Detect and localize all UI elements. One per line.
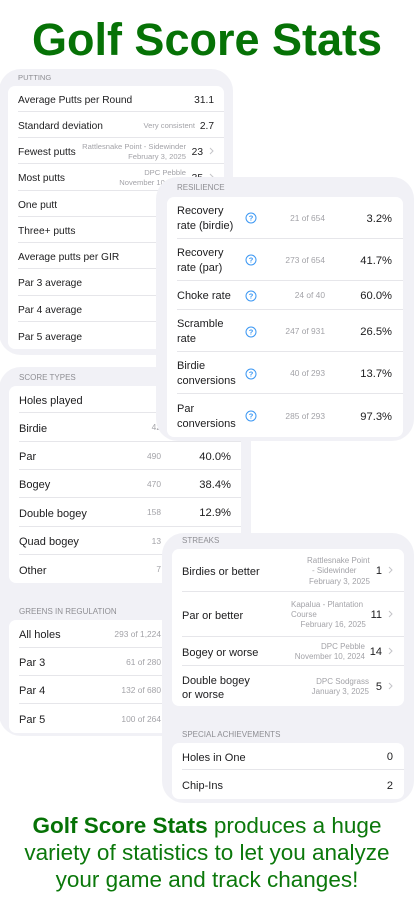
card: putting rows [8, 86, 224, 349]
row: par 4 [19, 676, 241, 704]
row: birdies or better: February 3, 2025 [309, 577, 370, 586]
row: recovery rate (par): ? [249, 255, 254, 264]
row: one putt: One putt [18, 200, 57, 211]
row: all holes [19, 620, 241, 648]
row: chip-ins: 2 [387, 780, 393, 792]
row: par conversions: 97.3% [360, 410, 392, 422]
row: bogey [19, 470, 241, 498]
row: par conversions: Par [177, 403, 194, 415]
panel: score types and greens in regulation [0, 367, 251, 736]
row: double bogey [19, 498, 241, 527]
row: all holes: 293 of 1,224 [114, 628, 161, 638]
row: other: 7 [156, 564, 161, 574]
card: resilience rows [167, 197, 403, 437]
row: fewest putts: February 3, 2025 [128, 152, 186, 160]
row: double bogey or worse: Double bogey [182, 674, 250, 686]
row: par or better: Kapalua - Plantation [291, 600, 363, 609]
row: par or better: February 16, 2025 [300, 620, 366, 629]
row: double bogey or worse: 5 [376, 681, 382, 693]
row: recovery rate (birdie): Recovery [177, 205, 223, 217]
row: recovery rate (birdie): 3.2% [366, 212, 392, 224]
row: scramble rate: Scramble [177, 318, 223, 330]
caption [24, 813, 390, 892]
row: birdie conversions: Birdie [177, 360, 205, 372]
row: par 4: Par 4 [19, 685, 45, 697]
row: recovery rate (par): 273 of 654 [285, 254, 325, 264]
row: double bogey: Double bogey [19, 508, 87, 520]
card: streaks rows [172, 549, 404, 706]
row: standard deviation: Standard deviation [18, 121, 103, 132]
row: par: 490 [147, 450, 161, 460]
caption: your game and track changes! [56, 867, 358, 892]
row: par 4 average [18, 296, 224, 322]
row: average putts per GIR: Average putts per GIR [18, 252, 119, 263]
row: average putts per round: Average Putts per Round [18, 95, 132, 106]
row: fewest putts: Fewest putts [18, 147, 76, 158]
row: par conversions [177, 403, 392, 430]
row: double bogey: 158 [147, 507, 161, 517]
row: chip-ins: Chip-Ins [182, 780, 223, 792]
row: holes in one [182, 743, 404, 770]
heading: resilience: RESILIENCE [177, 183, 225, 192]
row: most putts: November 10, 2024 [119, 178, 186, 187]
row: standard deviation: Very consistent [144, 121, 195, 130]
row: double bogey or worse: DPC Sodgrass [316, 677, 369, 686]
row: par or better: Course [291, 610, 317, 619]
row: birdies or better: Birdies or better [182, 566, 260, 578]
row: par [19, 442, 241, 470]
card: special achievements rows [172, 743, 404, 799]
row: double bogey or worse [182, 674, 392, 701]
row: standard deviation: 2.7 [200, 120, 214, 132]
title: Golf Score Stats [32, 14, 382, 65]
row: par 5: 100 of 264 [121, 714, 161, 724]
row: birdies or better: - Sidewinder [312, 566, 356, 575]
row: chip-ins [182, 780, 393, 792]
row: recovery rate (birdie): 21 of 654 [290, 212, 325, 222]
row: bogey or worse [182, 637, 404, 666]
row: choke rate [177, 281, 403, 310]
row: recovery rate (birdie): rate (birdie) [177, 220, 233, 232]
row: par 3 [19, 648, 241, 676]
row: birdie [19, 413, 241, 442]
row: birdies or better: 1 [376, 565, 382, 577]
row: choke rate: 24 of 40 [295, 290, 325, 300]
row: bogey or worse: November 10, 2024 [295, 652, 365, 661]
row: par: Par [19, 451, 36, 463]
row: average putts per GIR [18, 243, 224, 269]
heading: greens in regulation: GREENS IN REGULATION [19, 607, 117, 616]
row: scramble rate: ? [249, 327, 254, 336]
heading: putting: PUTTING [18, 73, 51, 82]
row: par 4: 132 of 680 [121, 684, 161, 694]
caption: variety of statistics to let you analyze [24, 840, 390, 865]
row: quad bogey [19, 527, 241, 555]
row: all holes: All holes [19, 629, 61, 641]
row: other: Other [19, 565, 47, 577]
row: par: 40.0% [199, 450, 231, 462]
row: standard deviation [18, 112, 224, 138]
heading: score types: SCORE TYPES [19, 373, 76, 382]
card: score types rows [9, 386, 241, 583]
row: birdies or better: Rattlesnake Point [307, 556, 370, 565]
row: scramble rate: 26.5% [360, 326, 392, 338]
row: fewest putts [18, 138, 224, 164]
row: recovery rate (par): 41.7% [360, 254, 392, 266]
panel: putting [0, 69, 233, 355]
row: birdies or better [182, 549, 404, 592]
row: recovery rate (birdie) [177, 197, 403, 239]
row: most putts: 35 [192, 173, 203, 184]
row: birdie: Birdie [19, 423, 47, 435]
row: bogey or worse: 14 [370, 646, 382, 658]
row: par conversions: ? [249, 411, 254, 420]
row: quad bogey: 13 [152, 536, 161, 546]
row: birdie conversions: 13.7% [360, 368, 392, 380]
row: par or better: 11 [371, 609, 382, 621]
row: recovery rate (par): Recovery [177, 247, 223, 259]
panel: resilience [156, 177, 414, 441]
row: double bogey or worse: January 3, 2025 [312, 687, 369, 696]
row: most putts [18, 164, 224, 191]
row: par 5: Par 5 [19, 714, 45, 726]
heading: streaks: STREAKS [182, 536, 219, 545]
row: par 3 average: Par 3 average [18, 278, 82, 289]
row: birdie conversions: 40 of 293 [290, 368, 325, 378]
row: most putts: DPC Pebble [144, 168, 186, 177]
card: greens in regulation rows [9, 620, 241, 733]
row: choke rate: 60.0% [360, 290, 392, 302]
row: birdie conversions: ? [249, 369, 254, 378]
row: par 4 average: Par 4 average [18, 305, 82, 316]
row: holes played: Holes played [19, 395, 83, 407]
row: choke rate: ? [249, 292, 254, 301]
row: bogey or worse: DPC Pebble [321, 642, 365, 651]
row: fewest putts: Rattlesnake Point - Sidewinder [82, 142, 186, 151]
row: bogey or worse: Bogey or worse [182, 647, 258, 659]
row: par or better [182, 592, 404, 637]
row: birdie: 42 [152, 422, 161, 432]
row: par conversions: conversions [177, 418, 236, 430]
row: bogey: Bogey [19, 479, 50, 491]
row: par 5 [19, 714, 161, 726]
row: recovery rate (birdie): ? [249, 213, 254, 222]
row: scramble rate: 247 of 931 [285, 326, 325, 336]
row: bogey: 470 [147, 478, 161, 488]
row: average putts per round [18, 86, 224, 112]
row: par 5 average: Par 5 average [18, 332, 82, 343]
row: other [19, 564, 161, 577]
row: bogey: 38.4% [199, 478, 231, 490]
row: average putts per round: 31.1 [194, 94, 214, 106]
row: holes in one: 0 [387, 751, 393, 763]
row: double bogey or worse: or worse [182, 689, 224, 701]
row: par 3: 61 of 280 [126, 656, 161, 666]
row: recovery rate (par) [177, 239, 403, 281]
row: three+ putts [18, 217, 224, 243]
caption: Golf Score Stats produces a huge [33, 813, 381, 838]
row: scramble rate [177, 310, 403, 352]
row: par or better: Par or better [182, 610, 243, 622]
row: quad bogey: Quad bogey [19, 536, 79, 548]
row: par 3: Par 3 [19, 657, 45, 669]
row: choke rate: Choke rate [177, 290, 231, 302]
row: birdie conversions: conversions [177, 374, 236, 386]
row: double bogey: 12.9% [199, 507, 231, 519]
row: birdie conversions [177, 352, 403, 394]
row: three+ putts: Three+ putts [18, 226, 75, 237]
row: one putt [18, 191, 224, 217]
row: par 3 average [18, 269, 224, 296]
row: recovery rate (par): rate (par) [177, 262, 222, 274]
row: fewest putts: 23 [192, 146, 203, 158]
row: most putts: Most putts [18, 173, 65, 184]
row: par conversions: 285 of 293 [285, 410, 325, 420]
panel: streaks and special achievements [162, 533, 414, 803]
row: holes in one: Holes in One [182, 752, 246, 764]
heading: special achievements: SPECIAL ACHIEVEMENTS [182, 730, 280, 739]
row: scramble rate: rate [177, 332, 196, 344]
row: holes played [19, 386, 241, 413]
